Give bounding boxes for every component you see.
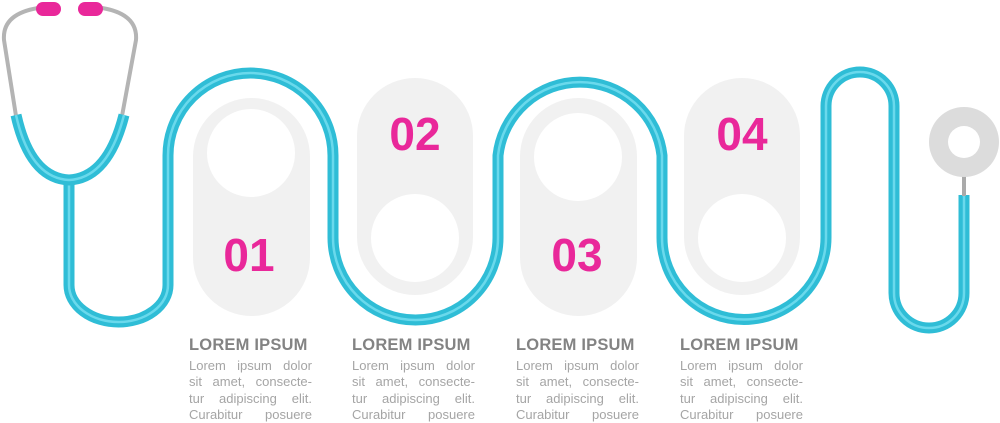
- icon: headset binaurals: [4, 2, 136, 180]
- text block 1: sit amet, consecte-: [189, 374, 312, 389]
- pill 4: 04: [716, 108, 768, 160]
- text block 4: sit amet, consecte-: [680, 374, 803, 389]
- text block 1: LOREM IPSUM: [189, 336, 308, 354]
- text block 4: tur adipiscing elit.: [680, 391, 803, 406]
- text block 1: [189, 336, 312, 422]
- text block 1: Lorem ipsum dolor: [189, 358, 312, 373]
- pill 1: [193, 98, 310, 316]
- text block 2: Curabitur posuere: [352, 407, 475, 422]
- text block 2: LOREM IPSUM: [352, 336, 471, 354]
- text block 4: Lorem ipsum dolor: [680, 358, 803, 373]
- text block 4: LOREM IPSUM: [680, 336, 799, 354]
- text block 3: LOREM IPSUM: [516, 336, 635, 354]
- stethoscope tube: [69, 72, 964, 328]
- text block 3: Curabitur posuere: [516, 407, 639, 422]
- pill 1: 01: [223, 229, 275, 281]
- text block 2: [352, 336, 475, 422]
- text block 1: tur adipiscing elit.: [189, 391, 312, 406]
- pill 3: [520, 98, 637, 316]
- text block 3: sit amet, consecte-: [516, 374, 639, 389]
- pill 2: 02: [389, 108, 441, 160]
- text block 2: Lorem ipsum dolor: [352, 358, 475, 373]
- text block 4: [680, 336, 803, 422]
- text block 2: sit amet, consecte-: [352, 374, 475, 389]
- text block 3: Lorem ipsum dolor: [516, 358, 639, 373]
- pill 3: 03: [551, 229, 603, 281]
- icon: chest piece: [929, 107, 999, 196]
- text block 1: Curabitur posuere: [189, 407, 312, 422]
- text block 4: Curabitur posuere: [680, 407, 803, 422]
- pill 2: [357, 78, 473, 295]
- text block 2: tur adipiscing elit.: [352, 391, 475, 406]
- text block 3: tur adipiscing elit.: [516, 391, 639, 406]
- text block 3: [516, 336, 639, 422]
- pill 4: [684, 78, 800, 295]
